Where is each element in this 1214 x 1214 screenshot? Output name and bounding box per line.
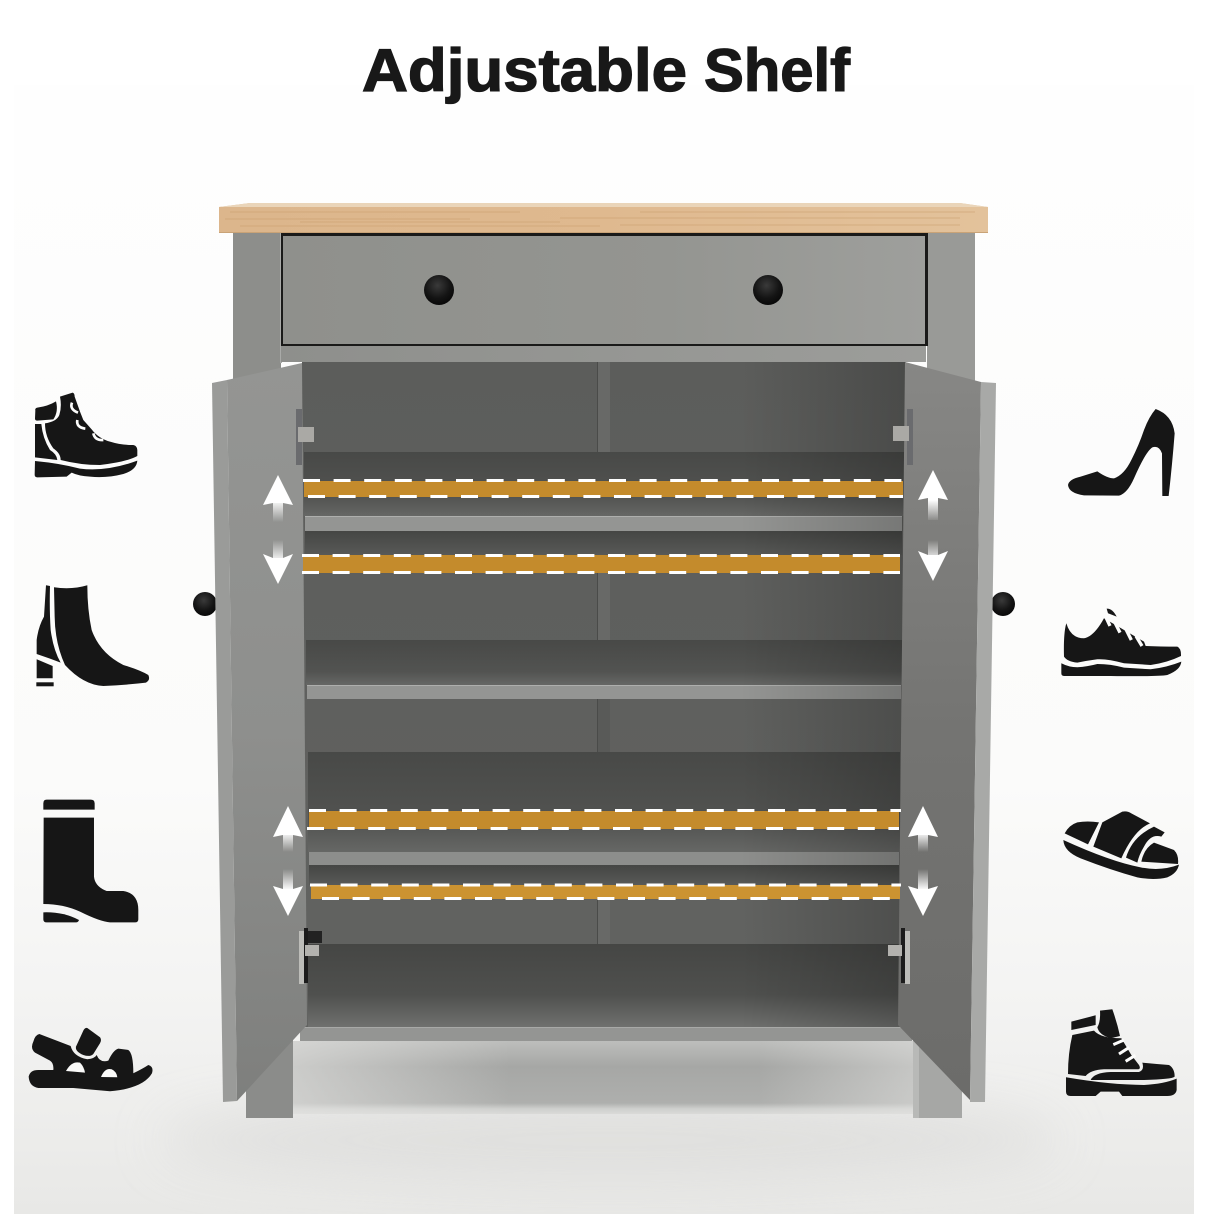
shelf highlight 3 xyxy=(307,810,901,829)
title: Adjustable xyxy=(362,37,687,104)
left door xyxy=(212,363,307,1102)
underside and feet xyxy=(246,1040,962,1118)
wooden top xyxy=(219,203,988,233)
arrow: upper right up and down xyxy=(918,470,948,581)
icon: ankle boot xyxy=(36,585,149,686)
knobs on door fronts, seen edge on xyxy=(193,592,1015,616)
icon: sandal xyxy=(29,1028,153,1091)
shoe cabinet xyxy=(193,203,1015,1118)
arrow: lower right up and down xyxy=(908,806,938,916)
icon: work boot xyxy=(1066,1009,1177,1096)
cabinet frame xyxy=(233,233,975,403)
shelf highlight 4 xyxy=(310,885,901,899)
shelf highlight 1 xyxy=(303,480,903,497)
icon: rain boot xyxy=(43,800,138,922)
icon: hiking boot xyxy=(35,393,137,477)
interior compartments xyxy=(300,362,912,1041)
icon: sneaker xyxy=(1061,609,1181,676)
hinges xyxy=(296,409,913,984)
drawer knob right xyxy=(753,275,783,305)
drawer knob left xyxy=(424,275,454,305)
arrow: lower left up and down xyxy=(273,806,303,916)
drawer xyxy=(281,233,928,346)
right door xyxy=(898,362,996,1102)
icon: high heel xyxy=(1068,409,1175,496)
title xyxy=(362,37,851,104)
icon: slide sandal xyxy=(1063,811,1179,879)
highlighted adjustable shelves xyxy=(302,480,903,899)
shelf highlight 2 xyxy=(302,555,900,573)
title: Shelf xyxy=(704,37,851,104)
arrow: upper left up and down xyxy=(263,475,293,584)
